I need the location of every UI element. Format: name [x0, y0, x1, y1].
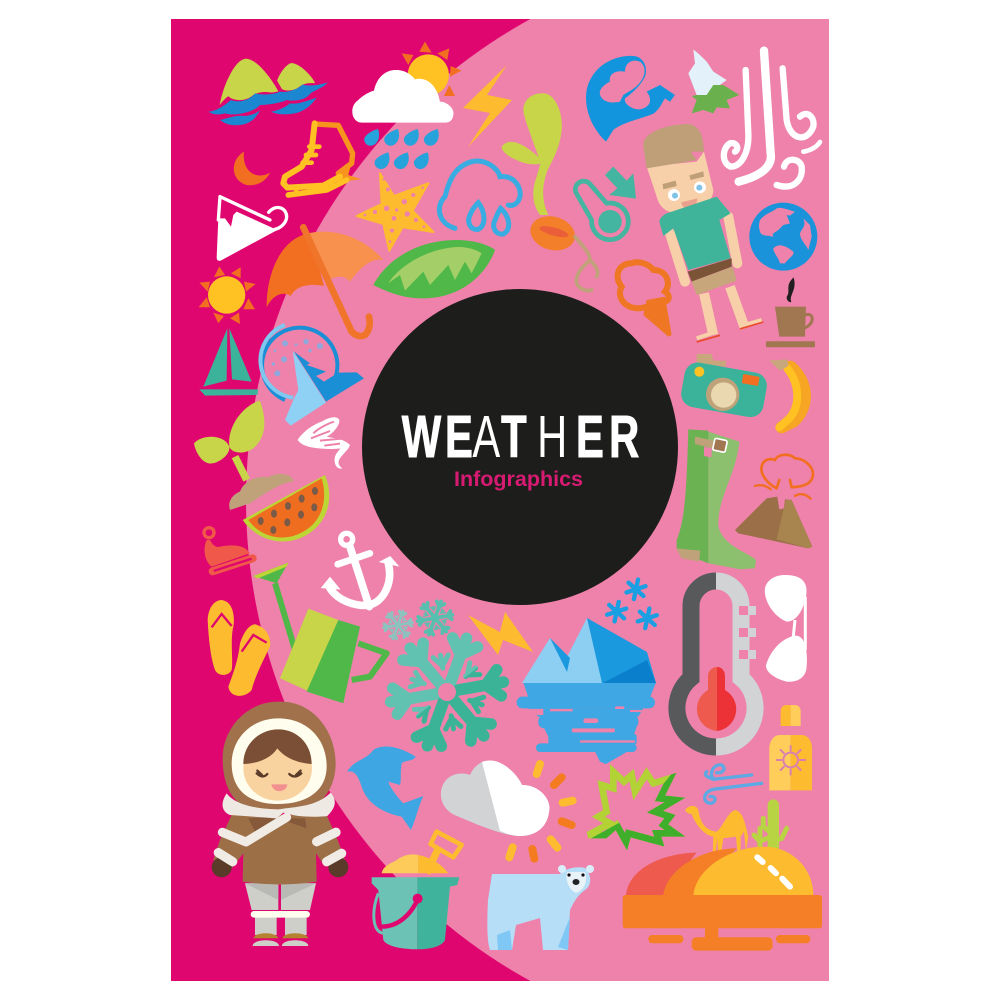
icon: flip flops — [208, 600, 270, 696]
icon: teal thermometer and arrow — [575, 167, 636, 240]
icon: rain drops — [364, 129, 439, 169]
icon: boy in teal shirt — [643, 124, 763, 342]
icon: iceberg on water — [517, 618, 656, 764]
icon: desert with camel and cactus — [623, 805, 822, 951]
icon: large two-tone snowflake — [384, 632, 510, 752]
icon: blue breeze — [705, 765, 762, 803]
icon: watermelon slice — [243, 475, 329, 541]
icon: ice cream cone — [618, 262, 672, 337]
title: WEATHER: E — [445, 404, 473, 470]
icon: rain cloud outline — [439, 161, 520, 234]
icon: dolphin — [347, 747, 423, 830]
icon: small sprout — [194, 401, 264, 480]
icon: grey thermometer — [677, 581, 756, 747]
title: WEATHER: A — [472, 404, 501, 470]
title: WEATHER: H — [537, 404, 567, 470]
background: magenta cover panel — [171, 19, 829, 981]
icon: ice skate — [283, 123, 362, 195]
title: WEATHER: W — [402, 404, 442, 470]
icon: green leaf — [373, 240, 495, 298]
icon: coral hat — [204, 528, 253, 571]
background: pink circle — [246, 19, 829, 981]
icon: large sprout with seed — [502, 93, 598, 291]
icon: child in parka — [212, 702, 348, 946]
icon: banana — [769, 359, 805, 427]
icon: cloud with sun rays — [441, 761, 573, 859]
icon: sand bucket and spade — [372, 832, 462, 949]
icon: sailboat — [199, 328, 258, 396]
icon: anchor — [323, 533, 397, 607]
icon: crescent moon — [234, 152, 270, 185]
icon: camera — [679, 354, 769, 419]
icon: rain boot — [676, 429, 756, 569]
icon: white wind swirls — [724, 51, 820, 187]
icon: mountains and waves — [208, 58, 328, 125]
icon: white mountain peak — [217, 197, 287, 261]
icon: earth globe — [749, 203, 817, 271]
title: WEATHER: T — [501, 404, 527, 470]
icon: teal snowflake — [413, 595, 457, 641]
icon: pale snowflake — [380, 606, 416, 644]
icon: volcano — [735, 455, 813, 548]
icon: sun behind cloud — [352, 42, 462, 123]
icon: small yellow lightning — [468, 612, 533, 655]
icon: umbrella — [267, 227, 383, 336]
title badge — [362, 289, 678, 605]
icon: snow globe with tree — [260, 325, 364, 426]
icon: tan cloud — [229, 474, 293, 510]
title: WEATHER: E — [576, 404, 604, 470]
book cover illustration — [171, 19, 829, 981]
icon: polar bear — [487, 865, 594, 950]
icon: maple leaf — [588, 772, 675, 842]
icon: sunscreen bottle — [769, 705, 812, 790]
icon: lightning bolt — [463, 65, 512, 147]
icon: blue asterisk snowflakes — [606, 578, 658, 630]
icon: sun — [199, 267, 256, 324]
icon: ocean wave — [586, 56, 675, 142]
icon: snowy pine tree — [688, 49, 739, 113]
icon: watering can — [253, 563, 387, 703]
icon: starfish — [357, 173, 433, 251]
title: WEATHER: R — [609, 404, 639, 470]
subtitle: Infographics: Infographics — [454, 468, 583, 491]
icon: white sunglasses — [765, 575, 807, 682]
icon: coffee cup — [766, 278, 815, 347]
icon: tornado — [298, 417, 350, 469]
